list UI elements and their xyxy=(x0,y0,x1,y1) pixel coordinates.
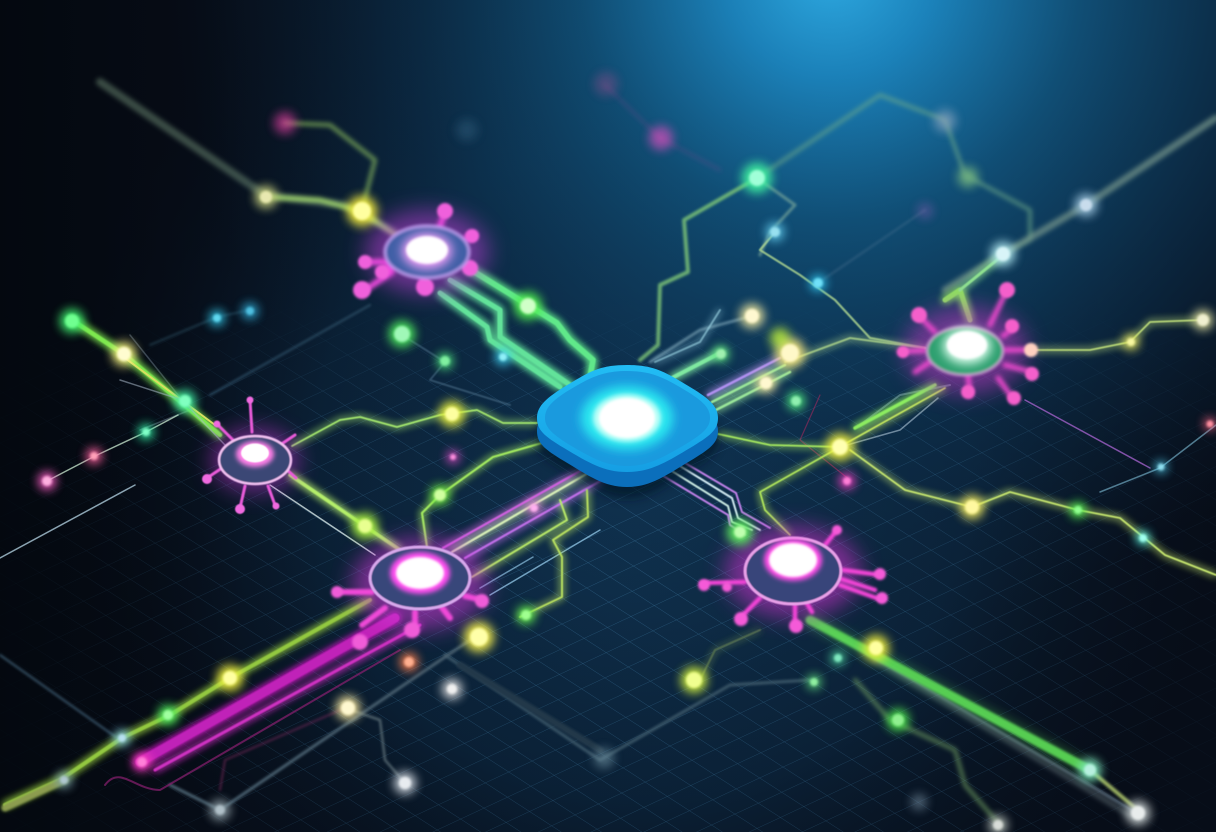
node: lower right xyxy=(698,525,888,633)
node: upper right xyxy=(897,282,1039,405)
node: left xyxy=(202,396,299,514)
blurred background traces xyxy=(100,82,1216,290)
node: lower left xyxy=(331,538,489,650)
main bundle: lower-left traces xyxy=(5,322,602,808)
main bundle: lower-right traces xyxy=(660,385,1216,812)
main bundle: upper-left traces xyxy=(440,268,593,387)
hub top face xyxy=(537,365,718,472)
hub side wall xyxy=(537,380,718,487)
node: upper left xyxy=(353,203,489,299)
hub glow and drop shadow xyxy=(537,386,718,498)
right side traces xyxy=(700,255,1203,680)
main bundle: upper-right traces xyxy=(655,310,925,410)
neutral dark traces xyxy=(0,178,1216,825)
hub inner face xyxy=(545,371,710,466)
central hub xyxy=(537,365,718,498)
